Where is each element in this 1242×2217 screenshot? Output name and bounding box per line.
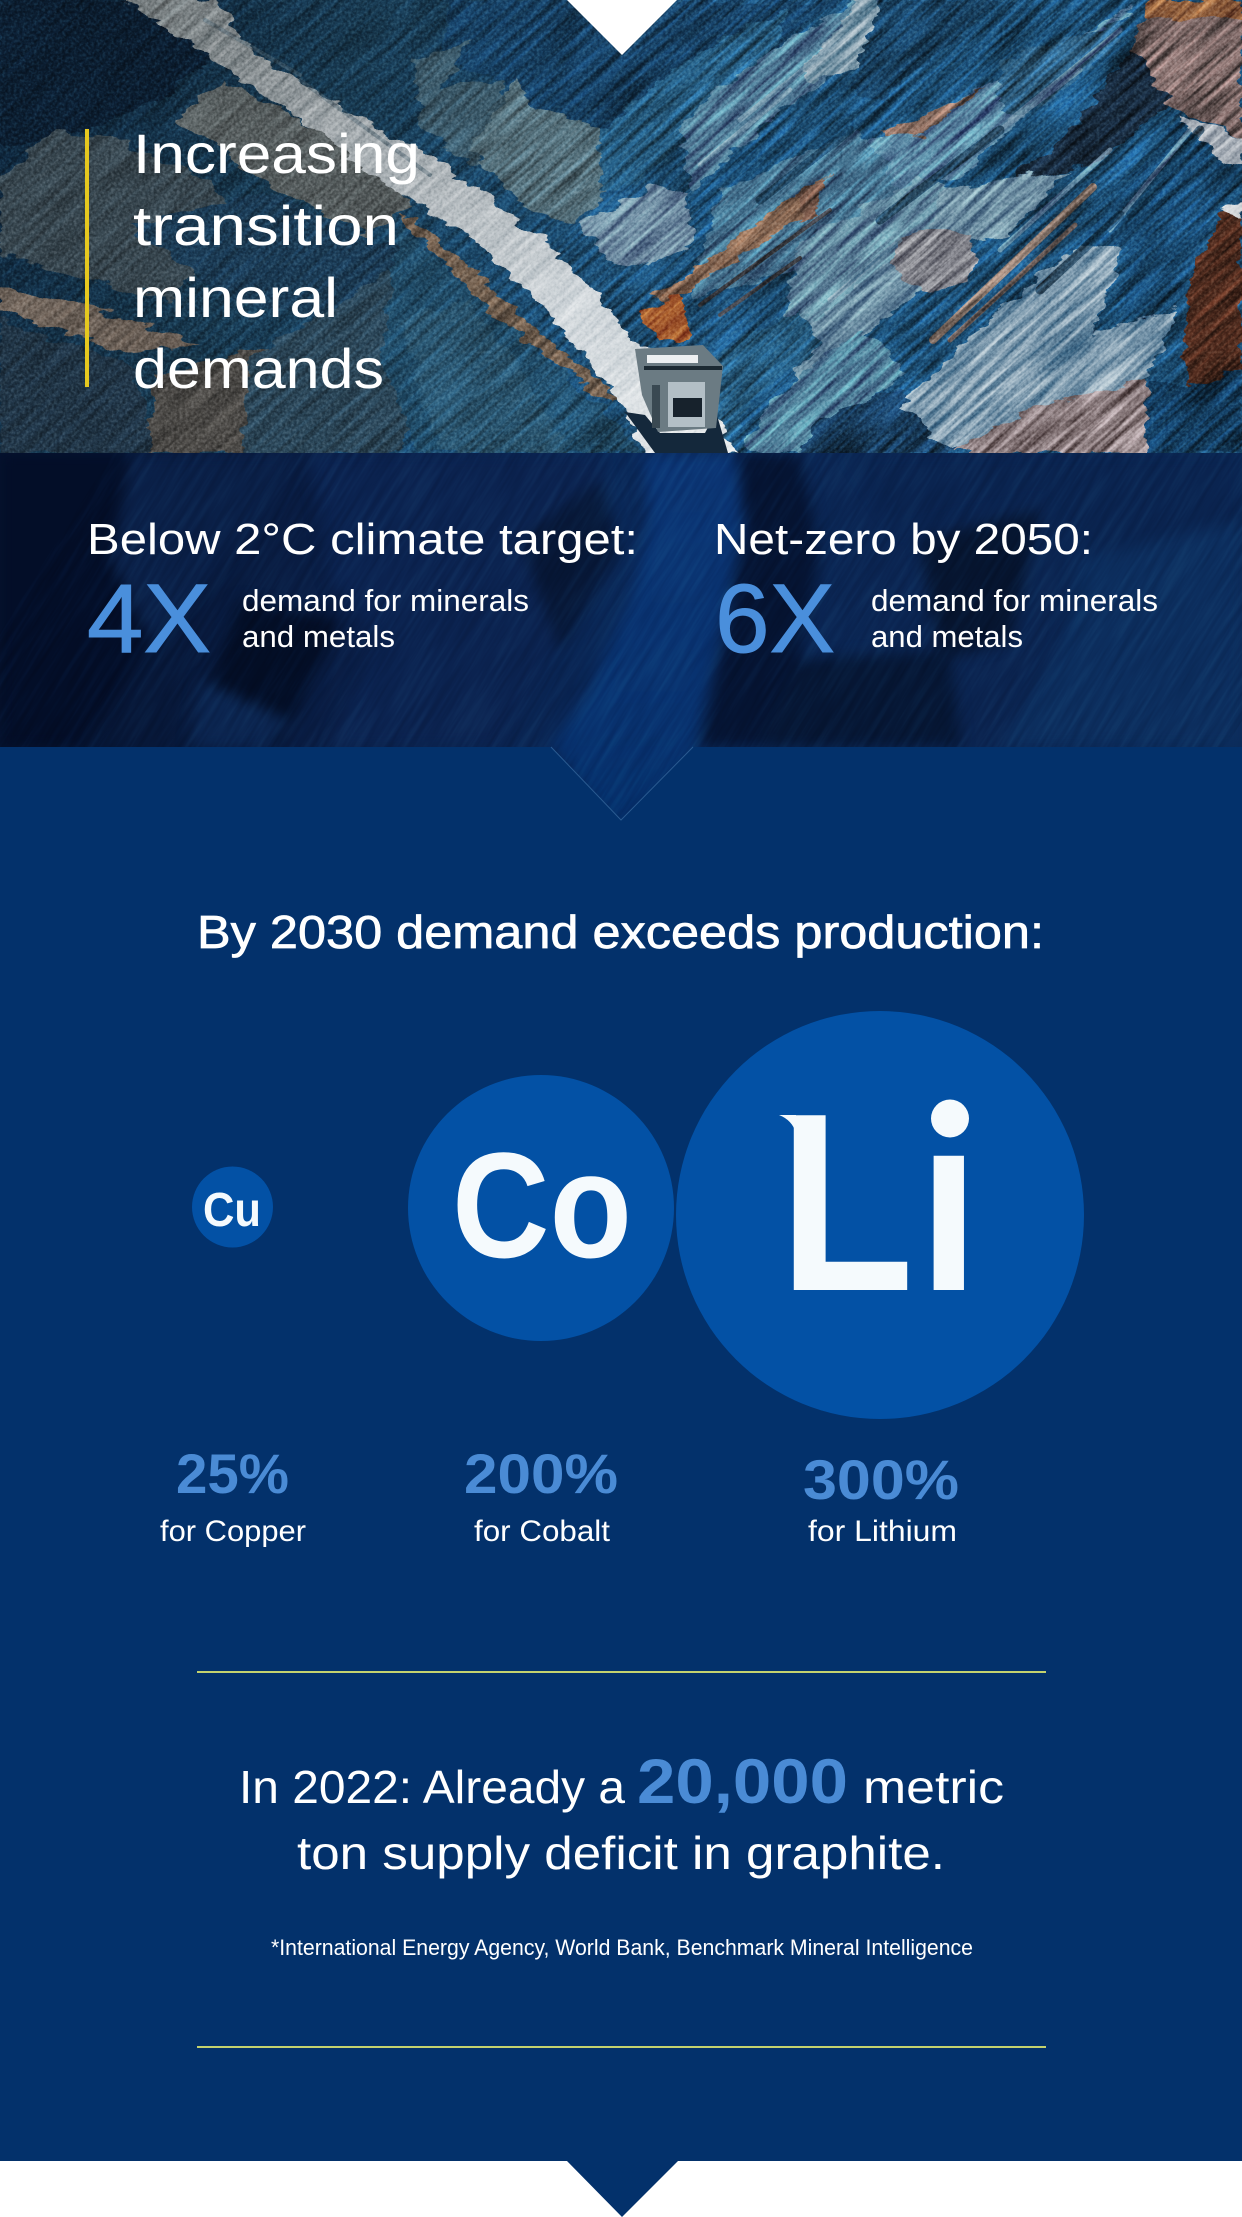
title: mineral bbox=[133, 266, 338, 329]
stat: cobalt bbox=[464, 1442, 618, 1548]
stat: lithium bbox=[803, 1448, 959, 1548]
title: transition bbox=[133, 194, 399, 257]
circle: copper bbox=[192, 1166, 273, 1248]
callout: graphite deficit: 20,000 bbox=[637, 1747, 848, 1817]
stat block: net-zero by 2050: Net-zero by 2050: bbox=[714, 515, 1093, 564]
panel: blue content section bbox=[0, 747, 1242, 2217]
accent bar bbox=[85, 129, 89, 387]
stat: lithium: 300% bbox=[803, 1448, 959, 1511]
stat: copper: for Copper bbox=[160, 1515, 306, 1548]
callout: graphite deficit: In 2022: Already a bbox=[239, 1761, 625, 1813]
title bbox=[133, 122, 420, 400]
arrow: top white notch bbox=[567, 0, 677, 55]
stat block: net-zero by 2050 bbox=[714, 515, 1158, 673]
source note: *International Energy Agency, World Bank, Benchmark Mineral Intelligence bbox=[271, 1935, 973, 1960]
stat: lithium: for Lithium bbox=[808, 1515, 957, 1548]
stat: copper bbox=[160, 1442, 306, 1548]
stat: cobalt: for Cobalt bbox=[474, 1515, 611, 1548]
circle: copper: Cu bbox=[203, 1184, 261, 1237]
road bbox=[125, 0, 735, 453]
stat block: below 2C target: Below 2°C climate target: bbox=[87, 515, 638, 564]
stat block: below 2C target: 4X bbox=[87, 564, 211, 673]
icon: haul truck bbox=[625, 345, 728, 453]
stat block: net-zero by 2050: demand for minerals bbox=[871, 583, 1158, 618]
stat block: net-zero by 2050: 6X bbox=[715, 564, 835, 673]
panel: hero mine photo with haul truck bbox=[0, 0, 1242, 453]
panel: dark blue photo band bbox=[0, 453, 1242, 820]
title: Increasing bbox=[133, 122, 420, 185]
circle: cobalt: Co bbox=[452, 1121, 632, 1289]
stat block: below 2C target: demand for minerals bbox=[242, 583, 529, 618]
circle: lithium: Li bbox=[779, 1061, 980, 1344]
stat: copper: 25% bbox=[176, 1442, 289, 1505]
circle: lithium bbox=[676, 1011, 1084, 1419]
arrow: hairline chevron bbox=[551, 747, 693, 820]
callout: graphite deficit: ton supply deficit in graphite. bbox=[297, 1827, 945, 1879]
callout: graphite deficit bbox=[239, 1747, 1004, 1879]
circle: cobalt bbox=[408, 1075, 674, 1341]
heading: demand exceeds production: By 2030 demand exceeds production: bbox=[197, 906, 1044, 958]
stat block: net-zero by 2050: and metals bbox=[871, 619, 1023, 654]
stat block: below 2C target bbox=[87, 515, 638, 673]
callout: graphite deficit: metric bbox=[863, 1761, 1004, 1813]
stat: cobalt: 200% bbox=[464, 1442, 618, 1505]
title: demands bbox=[133, 337, 384, 400]
stat block: below 2C target: and metals bbox=[242, 619, 395, 654]
texture bbox=[0, 0, 1242, 453]
